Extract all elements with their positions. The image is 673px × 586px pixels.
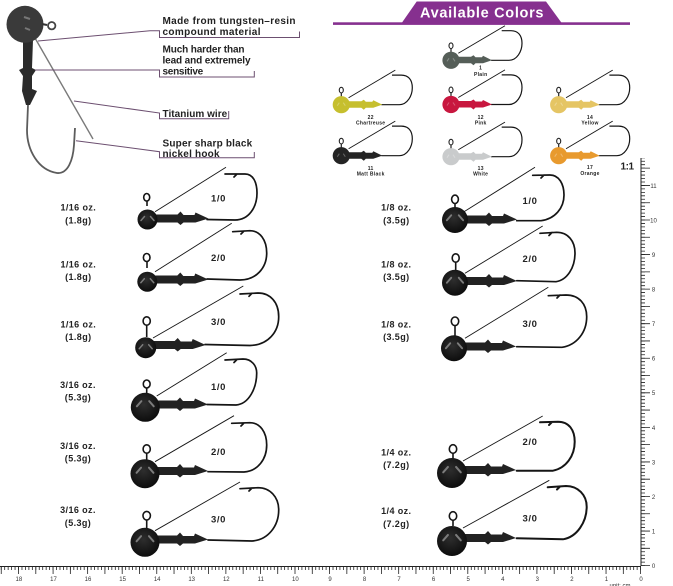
- vertical ruler: 9: [652, 253, 656, 259]
- color sample: orange: [550, 121, 630, 177]
- color sample: chartreuse: [333, 70, 412, 127]
- horizontal ruler: 11: [258, 577, 265, 583]
- vertical ruler: 7: [652, 322, 656, 328]
- color sample: pink: Pink: [475, 121, 487, 127]
- horizontal ruler: 9: [328, 577, 332, 583]
- horizontal ruler: 0: [639, 577, 643, 583]
- color sample: white: [442, 122, 522, 178]
- jig: 1/8 oz 1/0: 1/8 oz.: [381, 203, 411, 213]
- vertical ruler: 10: [650, 218, 657, 224]
- horizontal ruler: 7: [397, 577, 401, 583]
- vertical ruler: 3: [652, 460, 656, 466]
- jig: 1/4 oz 2/0: [381, 416, 575, 488]
- jig: 1/4 oz 3/0: 3/0: [522, 514, 538, 525]
- horizontal ruler: 18: [16, 577, 23, 583]
- jig: 1/16 oz 1/0: (1.8g): [65, 215, 92, 225]
- horizontal ruler: 2: [570, 577, 574, 583]
- jig: 3/16 oz 1/0: 1/0: [211, 382, 226, 393]
- vertical ruler: 0: [652, 564, 656, 570]
- color sample: plain: 1: [479, 66, 482, 72]
- vertical ruler: 6: [652, 357, 656, 363]
- horizontal ruler: 3: [536, 577, 540, 583]
- jig: 1/8 oz 3/0: [381, 287, 587, 361]
- jig: 1/16 oz 1/0: [60, 167, 257, 230]
- jig: 1/8 oz 3/0: 3/0: [522, 319, 538, 330]
- jig: 1/16 oz 3/0: (1.8g): [65, 332, 92, 342]
- jig: 1/4 oz 2/0: (7.2g): [383, 460, 410, 470]
- callout: tungsten-resin material: [38, 16, 300, 41]
- color sample: chartreuse: 22: [368, 115, 374, 121]
- callout: titanium wire: [74, 101, 229, 120]
- jig: 1/16 oz 3/0: 1/16 oz.: [60, 319, 96, 329]
- callout: black nickel hook: Super sharp black: [162, 138, 253, 149]
- jig: 1/16 oz 3/0: 3/0: [211, 317, 226, 328]
- color sample: chartreuse: Chartreuse: [356, 121, 385, 127]
- horizontal ruler: 15: [119, 577, 127, 583]
- callout: titanium wire: Titanium wire: [162, 109, 228, 120]
- color sample: matt black: Matt Black: [357, 172, 385, 178]
- callout: black nickel hook: nickel hook: [162, 149, 220, 160]
- horizontal ruler: [0, 566, 643, 586]
- jig: 1/4 oz 3/0: [381, 480, 587, 556]
- callout: tungsten-resin material: Made from tungsten–resin: [162, 16, 296, 27]
- jig: 3/16 oz 2/0: (5.3g): [65, 454, 91, 464]
- horizontal ruler: 16: [85, 577, 92, 583]
- horizontal ruler: 4: [501, 577, 505, 583]
- color sample: plain: Plain: [474, 72, 487, 78]
- jig: 1/4 oz 3/0: 1/4 oz.: [381, 506, 411, 516]
- jig: 1/8 oz 3/0: 1/8 oz.: [381, 319, 411, 329]
- color sample: yellow: 14: [587, 115, 593, 121]
- jig: 1/4 oz 2/0: 1/4 oz.: [381, 448, 411, 458]
- horizontal ruler: 8: [363, 577, 367, 583]
- jig: 1/16 oz 2/0: 2/0: [211, 253, 226, 264]
- color sample: plain: [442, 26, 522, 78]
- color sample: matt black: [333, 121, 412, 178]
- heading: available colors banner: Available Colors: [420, 6, 544, 22]
- horizontal ruler: 1: [605, 577, 609, 583]
- vertical ruler: 5: [652, 391, 656, 397]
- vertical ruler: 8: [652, 288, 656, 294]
- horizontal ruler: 14: [154, 577, 161, 583]
- callout: harder than lead: sensitive: [162, 67, 204, 78]
- main jig illustration: [6, 6, 93, 173]
- jig: 3/16 oz 1/0: 3/16 oz.: [60, 380, 96, 390]
- jig: 1/16 oz 1/0: 1/16 oz.: [60, 203, 96, 213]
- jig: 1/8 oz 2/0: [381, 226, 575, 296]
- horizontal ruler: 6: [432, 577, 436, 583]
- jig: 3/16 oz 1/0: [60, 353, 257, 422]
- jig: 1/8 oz 2/0: 2/0: [522, 254, 538, 265]
- jig: 3/16 oz 3/0: (5.3g): [65, 518, 91, 528]
- jig: 1/8 oz 1/0: [381, 167, 564, 233]
- color sample: pink: [442, 70, 522, 127]
- jig: 1/8 oz 2/0: 1/8 oz.: [381, 259, 411, 269]
- horizontal ruler: 12: [223, 577, 230, 583]
- callout: tungsten-resin material: compound material: [162, 27, 261, 38]
- jig: 1/8 oz 1/0: (3.5g): [383, 215, 410, 225]
- jig: 1/8 oz 1/0: 1/0: [522, 196, 538, 207]
- jig: 3/16 oz 2/0: [60, 416, 267, 488]
- jig: 3/16 oz 3/0: [60, 482, 279, 557]
- jig: 1/16 oz 1/0: 1/0: [211, 194, 226, 205]
- jig: 1/8 oz 3/0: (3.5g): [383, 332, 410, 342]
- horizontal ruler: 10: [292, 577, 299, 583]
- jig: 3/16 oz 3/0: 3/16 oz.: [60, 505, 96, 515]
- color sample: orange: Orange: [580, 171, 600, 177]
- vertical ruler: 11: [650, 184, 657, 190]
- jig: 1/16 oz 2/0: [60, 223, 267, 292]
- callout: harder than lead: lead and extremely: [162, 56, 251, 67]
- horizontal ruler: 5: [467, 577, 471, 583]
- jig: 1/8 oz 2/0: (3.5g): [383, 272, 410, 282]
- color sample: yellow: [550, 70, 630, 127]
- vertical ruler: 1: [652, 529, 656, 535]
- jig: 1/16 oz 3/0: [60, 286, 279, 358]
- jig: 3/16 oz 1/0: (5.3g): [65, 393, 91, 403]
- color sample: white: White: [473, 172, 488, 178]
- jig: 1/4 oz 3/0: (7.2g): [383, 519, 410, 529]
- callout: harder than lead: [35, 45, 254, 78]
- jig: 1/16 oz 2/0: 1/16 oz.: [60, 259, 96, 269]
- jig: 1/4 oz 2/0: 2/0: [522, 437, 538, 448]
- scale label: 1:1: [620, 162, 634, 172]
- color sample: pink: 12: [478, 115, 484, 121]
- color sample: white: 13: [478, 166, 484, 172]
- horizontal ruler: 17: [50, 577, 57, 583]
- color sample: yellow: Yellow: [581, 121, 599, 127]
- jig: 3/16 oz 2/0: 3/16 oz.: [60, 441, 96, 451]
- jig: 3/16 oz 3/0: 3/0: [211, 515, 226, 526]
- jig: 1/16 oz 2/0: (1.8g): [65, 272, 92, 282]
- vertical ruler: 2: [652, 495, 656, 501]
- horizontal ruler: 13: [188, 577, 196, 583]
- callout: black nickel hook: [76, 138, 254, 160]
- callout: harder than lead: Much harder than: [162, 45, 244, 56]
- jig: 3/16 oz 2/0: 2/0: [211, 447, 226, 458]
- heading: available colors banner: [333, 2, 630, 25]
- vertical ruler: [641, 158, 657, 570]
- color sample: orange: 17: [587, 165, 593, 171]
- color sample: matt black: 11: [368, 166, 374, 172]
- vertical ruler: 4: [652, 426, 656, 432]
